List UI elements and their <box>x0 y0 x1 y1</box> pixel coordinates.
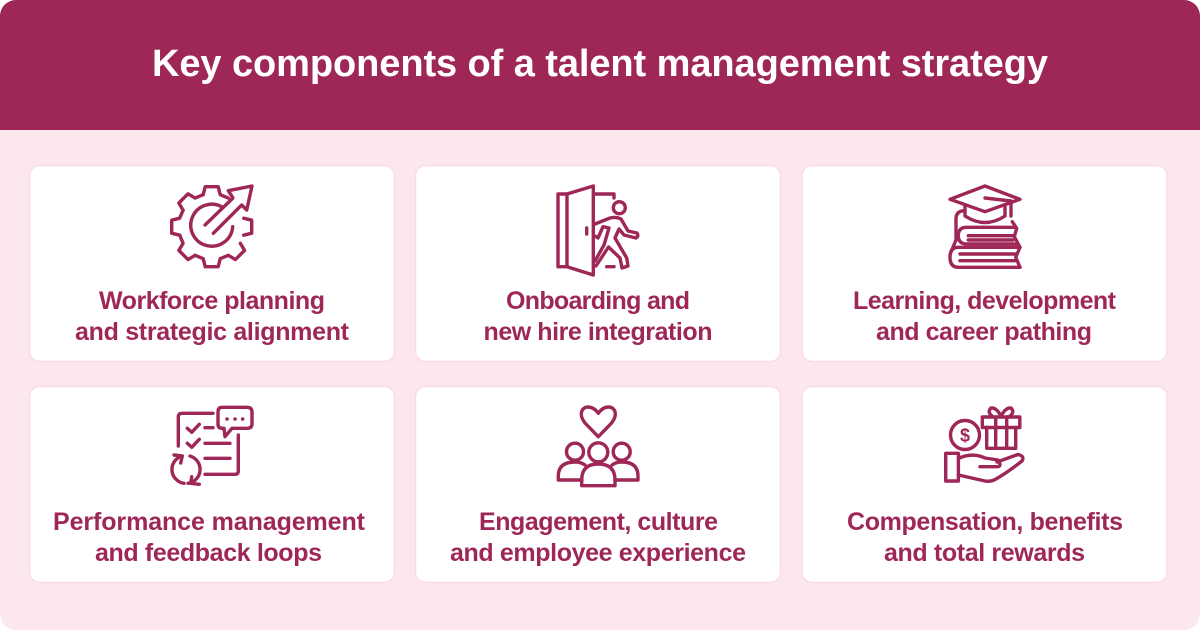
icon: graduation cap on books <box>950 186 1020 267</box>
panel: compensation <box>802 386 1167 582</box>
icon: gear with arrow <box>172 186 252 267</box>
panel: onboarding <box>416 166 780 362</box>
panel: learning <box>802 166 1167 362</box>
label <box>53 508 366 567</box>
label: Learning, development <box>853 287 1117 315</box>
label: and career pathing <box>876 318 1092 346</box>
icon: checklist with speech bubble <box>172 407 252 484</box>
label: Engagement, culture <box>479 508 718 536</box>
icon: door with walking person <box>558 186 638 275</box>
label: Onboarding and <box>506 287 690 315</box>
label: and strategic alignment <box>75 318 350 346</box>
label: Workforce planning <box>99 287 325 315</box>
icon: hand with coin and gift <box>946 408 1023 481</box>
label <box>450 508 746 567</box>
panel: workforce planning <box>30 166 394 362</box>
header band <box>0 0 1200 130</box>
label: Performance management <box>53 508 366 536</box>
panel: engagement <box>416 386 780 582</box>
label <box>484 287 712 346</box>
label <box>853 287 1117 346</box>
label: Compensation, benefits <box>847 508 1123 536</box>
label <box>847 508 1123 567</box>
label: and feedback loops <box>95 539 322 567</box>
icon: three people with heart <box>558 407 638 486</box>
label: and total rewards <box>884 539 1085 567</box>
label: new hire integration <box>484 318 712 346</box>
panel: performance <box>30 386 394 582</box>
label: and employee experience <box>450 539 746 567</box>
title: Key components of a talent management strategy <box>152 43 1048 85</box>
label <box>75 287 350 346</box>
icon: hand with coin and gift: $ <box>960 426 970 446</box>
